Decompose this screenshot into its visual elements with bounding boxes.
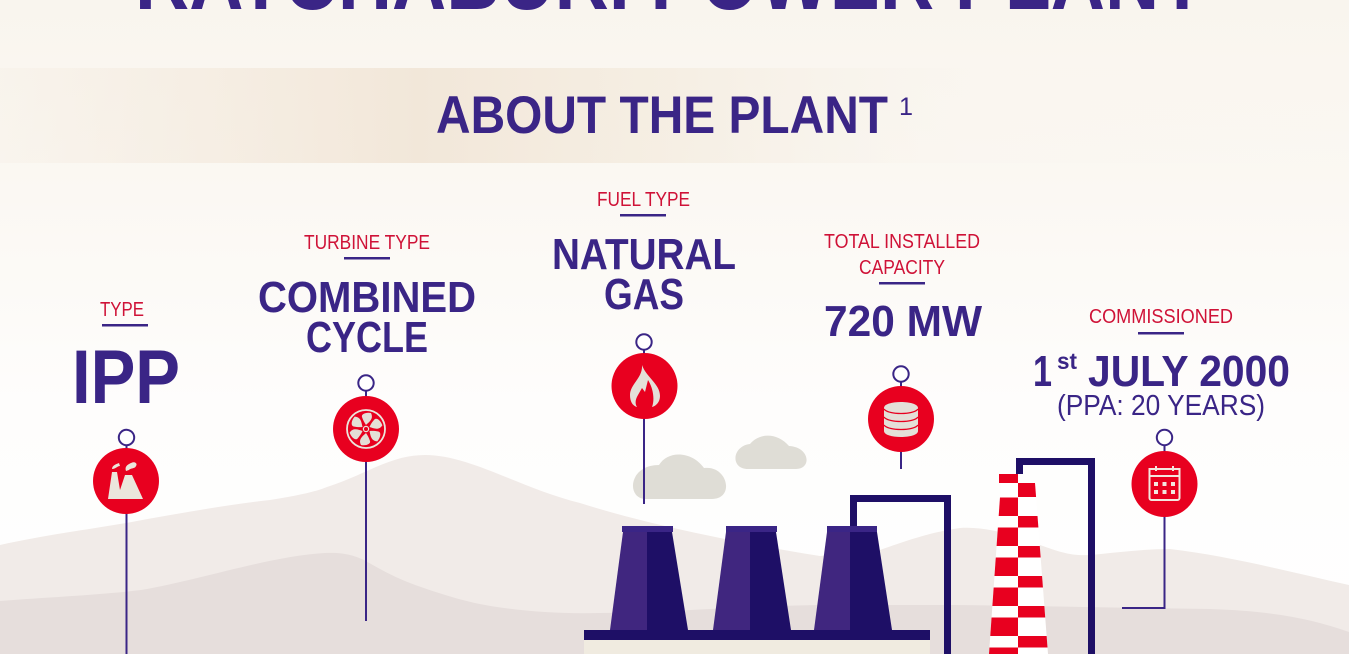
block: commissioned: 1 [1033, 347, 1052, 396]
block: type: TYPE [100, 299, 144, 321]
pin: fuel, flame icon [612, 334, 678, 504]
cloud right [735, 436, 807, 469]
block: fuel type: NATURAL [552, 230, 736, 279]
block: commissioned: st [1057, 348, 1077, 374]
block: commissioned: JULY 2000 [1088, 347, 1290, 396]
striped chimney [985, 474, 1050, 654]
block: capacity [824, 231, 982, 346]
chimney pipe [1020, 462, 1092, 654]
block: commissioned: (PPA: 20 YEARS) [1057, 390, 1265, 422]
block: capacity: 720 MW [824, 297, 982, 346]
block: type: IPP [72, 335, 180, 420]
cooling tower 3 [814, 526, 892, 630]
block: type [72, 299, 180, 420]
block: fuel type: GAS [604, 270, 684, 319]
cooling tower 1 [610, 526, 688, 630]
block: capacity: TOTAL INSTALLED [824, 231, 980, 253]
block: capacity: CAPACITY [859, 257, 945, 279]
block: turbine type [258, 232, 476, 362]
cooling tower 2 [713, 526, 791, 630]
block: turbine type: CYCLE [306, 313, 428, 362]
pin: commissioned, calendar icon [1122, 430, 1198, 608]
exhaust pipe behind cooling towers [854, 498, 948, 654]
cloud left [633, 454, 726, 499]
hills background [0, 455, 1349, 654]
block: commissioned: COMMISSIONED [1089, 306, 1233, 328]
pin: type, factory icon [93, 430, 159, 654]
block: commissioned [1033, 306, 1290, 422]
pin: turbine, fan icon [333, 375, 399, 621]
block: fuel type [552, 189, 736, 319]
power plant building base [584, 630, 930, 654]
block: turbine type: TURBINE TYPE [304, 232, 430, 254]
block: turbine type: COMBINED [258, 273, 476, 322]
pin: capacity, database icon [868, 366, 934, 469]
heading: about the plant: ABOUT THE PLANT [436, 86, 888, 145]
block: fuel type: FUEL TYPE [597, 189, 690, 211]
heading: about the plant: 1 [899, 93, 913, 121]
